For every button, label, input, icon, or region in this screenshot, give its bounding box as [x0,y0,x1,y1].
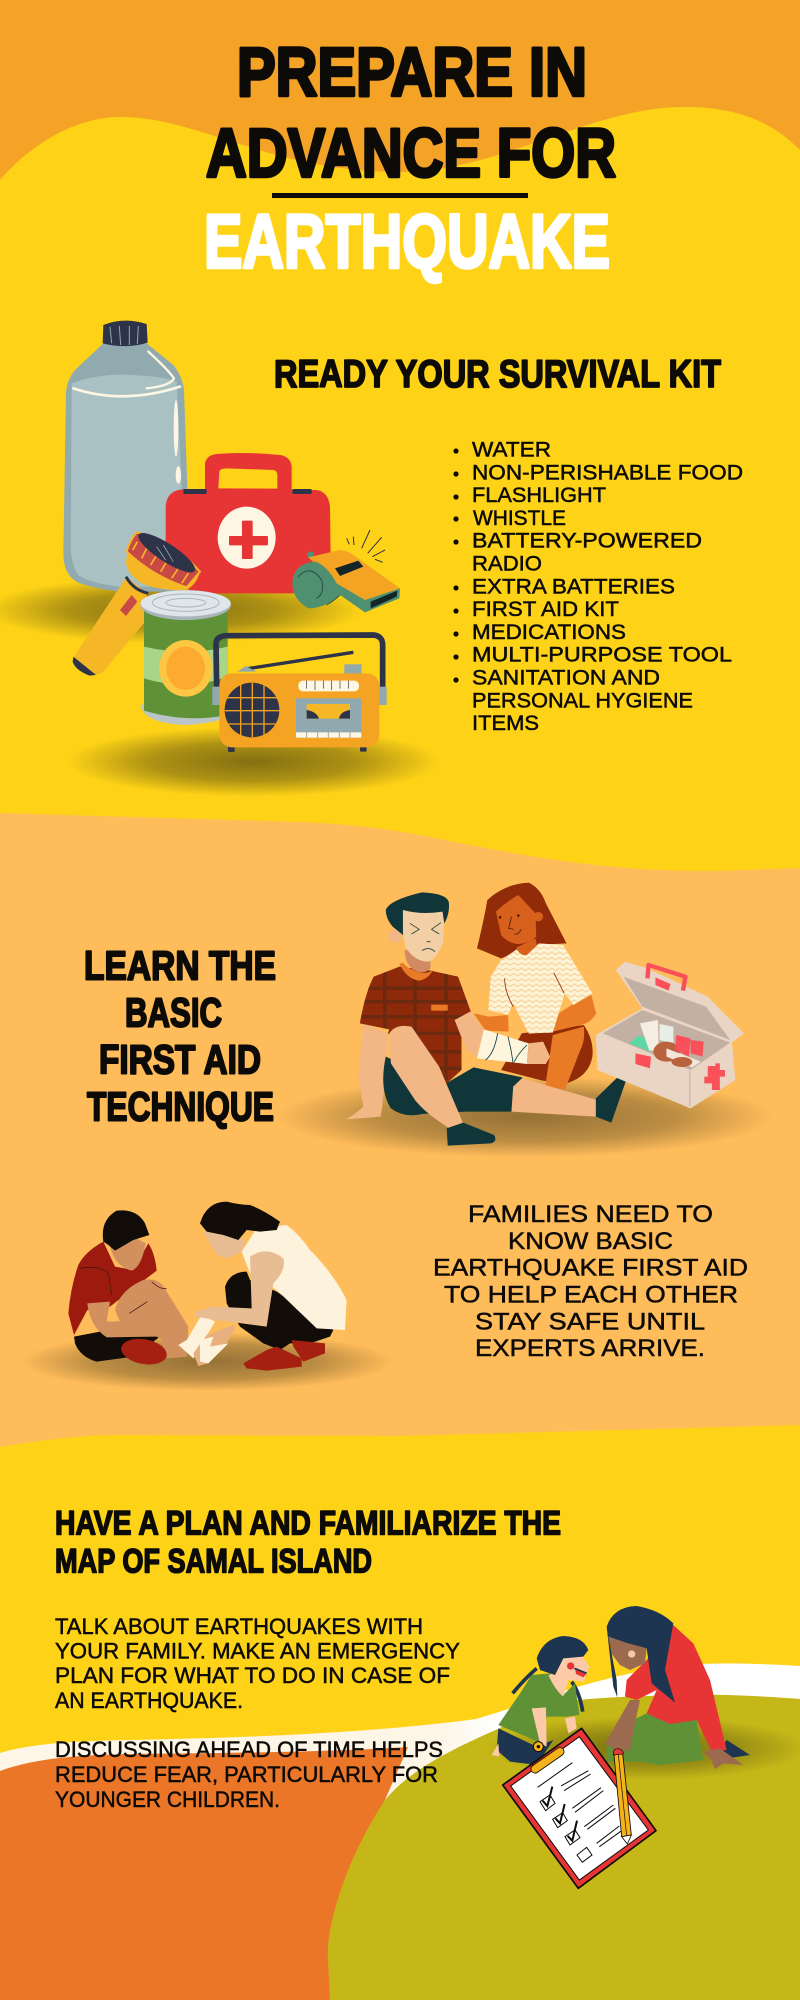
shadow [20,1332,393,1391]
icon: open medical box [596,962,744,1108]
list: survival kit checklist: ITEMS [472,712,539,735]
heading: ready your survival kit: READY YOUR SURVIVAL KIT [274,353,721,396]
text: discussing ahead paragraph [55,1737,443,1812]
text: family plan paragraph: YOUR FAMILY. MAKE AN EMERGENCY [55,1638,460,1664]
list: survival kit checklist: RADIO [472,552,542,576]
icon: food can [140,590,231,725]
figure: boy [68,1210,188,1368]
list: survival kit checklist: NON-PERISHABLE FOOD [472,461,743,484]
text: families need first aid: EXPERTS ARRIVE. [475,1335,705,1362]
text: families need first aid: TO HELP EACH OTHER [444,1282,738,1308]
heading: learn the basic first aid technique [84,942,276,1130]
list: survival kit checklist: WATER [472,438,551,462]
text: discussing ahead paragraph: DISCUSSING AHEAD OF TIME HELPS [55,1737,443,1762]
list: survival kit checklist: BATTERY-POWERED [472,530,702,553]
illustration: man with bandaged arm, helper and medical box [277,883,773,1157]
list: survival kit checklist: FLASHLIGHT [472,484,606,507]
text: family plan paragraph [55,1614,460,1713]
icon: flashlight [73,527,200,676]
figure: child [492,1636,589,1765]
figure: woman [195,1202,347,1371]
text: discussing ahead paragraph: YOUNGER CHILDREN. [55,1787,280,1812]
list: survival kit checklist: WHISTLE [473,507,566,530]
heading: learn the basic first aid technique: TECHNIQUE [87,1084,274,1130]
heading: have a plan [55,1504,561,1580]
text: families need first aid: FAMILIES NEED TO [468,1201,713,1228]
text: families need first aid [433,1201,748,1362]
text: families need first aid: STAY SAFE UNTIL [475,1308,705,1336]
heading: have a plan: HAVE A PLAN AND FAMILIARIZE THE [55,1504,561,1542]
figure: injured man [346,892,627,1146]
list: survival kit checklist: EXTRA BATTERIES [472,575,675,598]
icon: radio [212,635,387,752]
shadow [277,1076,773,1157]
text: families need first aid: EARTHQUAKE FIRST AID [433,1254,748,1282]
figure: mother [606,1606,750,1769]
shadow [487,1717,800,1780]
illustration: mother and child with checklist [487,1606,800,1888]
heading: learn the basic first aid technique: LEARN THE [84,942,276,988]
icon: clipboard checklist with pencil [503,1728,656,1888]
list: survival kit checklist: MULTI-PURPOSE TOOL [472,644,732,667]
text: family plan paragraph: TALK ABOUT EARTHQUAKES WITH [55,1614,423,1639]
illustration: woman bandaging boy's foot [20,1202,393,1391]
icon: water bottle [63,321,187,592]
figure: woman helper [474,883,596,1090]
icon: first aid kit [166,453,331,593]
list: survival kit checklist: MEDICATIONS [472,621,626,644]
heading: learn the basic first aid technique: FIRST AID [99,1036,261,1082]
title: PREPARE IN [237,34,587,110]
text: families need first aid: KNOW BASIC [508,1228,673,1255]
icon: whistle [292,530,400,612]
heading: have a plan: MAP OF SAMAL ISLAND [55,1542,372,1580]
list: survival kit checklist: FIRST AID KIT [472,598,619,621]
heading: learn the basic first aid technique: BASIC [125,990,222,1036]
list: survival kit checklist: PERSONAL HYGIENE [472,689,693,712]
icon: bandage on foot [178,1315,235,1366]
title: EARTHQUAKE [204,200,610,284]
shadow: lower [67,727,440,797]
list: survival kit checklist: SANITATION AND [472,666,660,690]
title: ADVANCE FOR [206,114,616,192]
title [204,34,616,284]
text: discussing ahead paragraph: REDUCE FEAR, PARTICULARLY FOR [55,1762,438,1787]
illustration: survival kit items [0,321,440,797]
text: family plan paragraph: PLAN FOR WHAT TO DO IN CASE OF [55,1663,450,1688]
list: survival kit checklist [453,438,743,735]
text: family plan paragraph: AN EARTHQUAKE. [55,1688,243,1713]
shadow: upper [0,577,363,643]
